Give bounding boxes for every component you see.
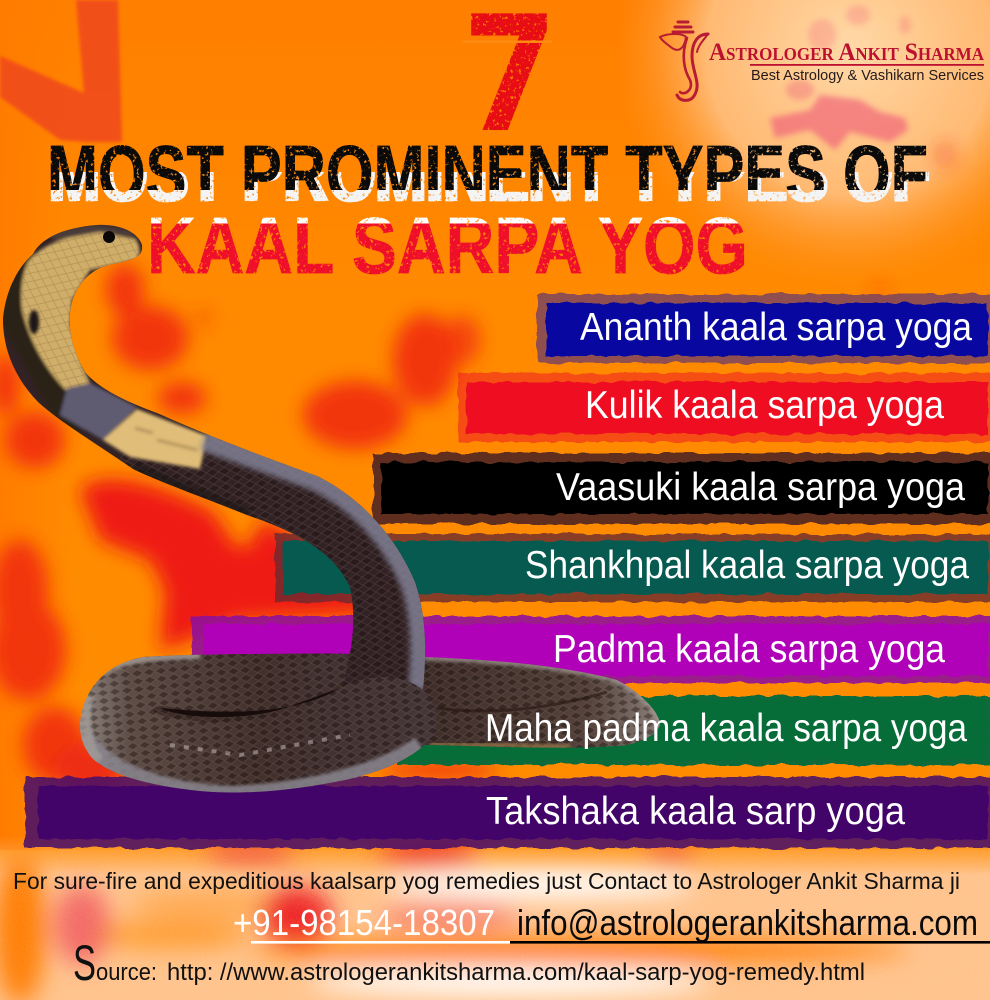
list of seven yogas xyxy=(485,306,972,833)
illustration: cobra xyxy=(0,220,665,800)
call to action text: For sure-fire and expeditious kaalsarp yog remedies just Contact to Astrologer Ankit Sharma ji xyxy=(13,868,960,894)
list item: Kulik: Kulik kaala sarpa yoga xyxy=(585,384,944,427)
source line: ource: xyxy=(96,959,157,986)
list item: Padma: Padma kaala sarpa yoga xyxy=(553,628,945,671)
heading: kaal sarpa yog: KAAL SARPA YOG xyxy=(147,201,748,290)
front coil xyxy=(80,654,436,792)
icon: cobra eye xyxy=(103,231,115,243)
logo: Astrologer Ankit Sharma xyxy=(660,22,984,100)
icon: stylised Ganesha xyxy=(660,22,708,100)
tagline: Best Astrology & Vashikarn Services xyxy=(751,68,984,84)
neck and hood xyxy=(0,220,440,695)
list item: Vaasuki: Vaasuki kaala sarpa yoga xyxy=(556,466,965,509)
panel: colour bars behind the list xyxy=(25,294,990,848)
source line xyxy=(73,935,865,991)
hole in the coil xyxy=(160,688,340,717)
source line: http: //www.astrologerankitsharma.com/kaal-sarp-yog-remedy.html xyxy=(167,959,865,986)
contact: phone number: +91-98154-18307 xyxy=(233,902,495,943)
source line: S xyxy=(73,935,96,991)
list item: Takshaka: Takshaka kaala sarp yoga xyxy=(486,790,905,833)
rear coil and tail xyxy=(140,650,665,750)
